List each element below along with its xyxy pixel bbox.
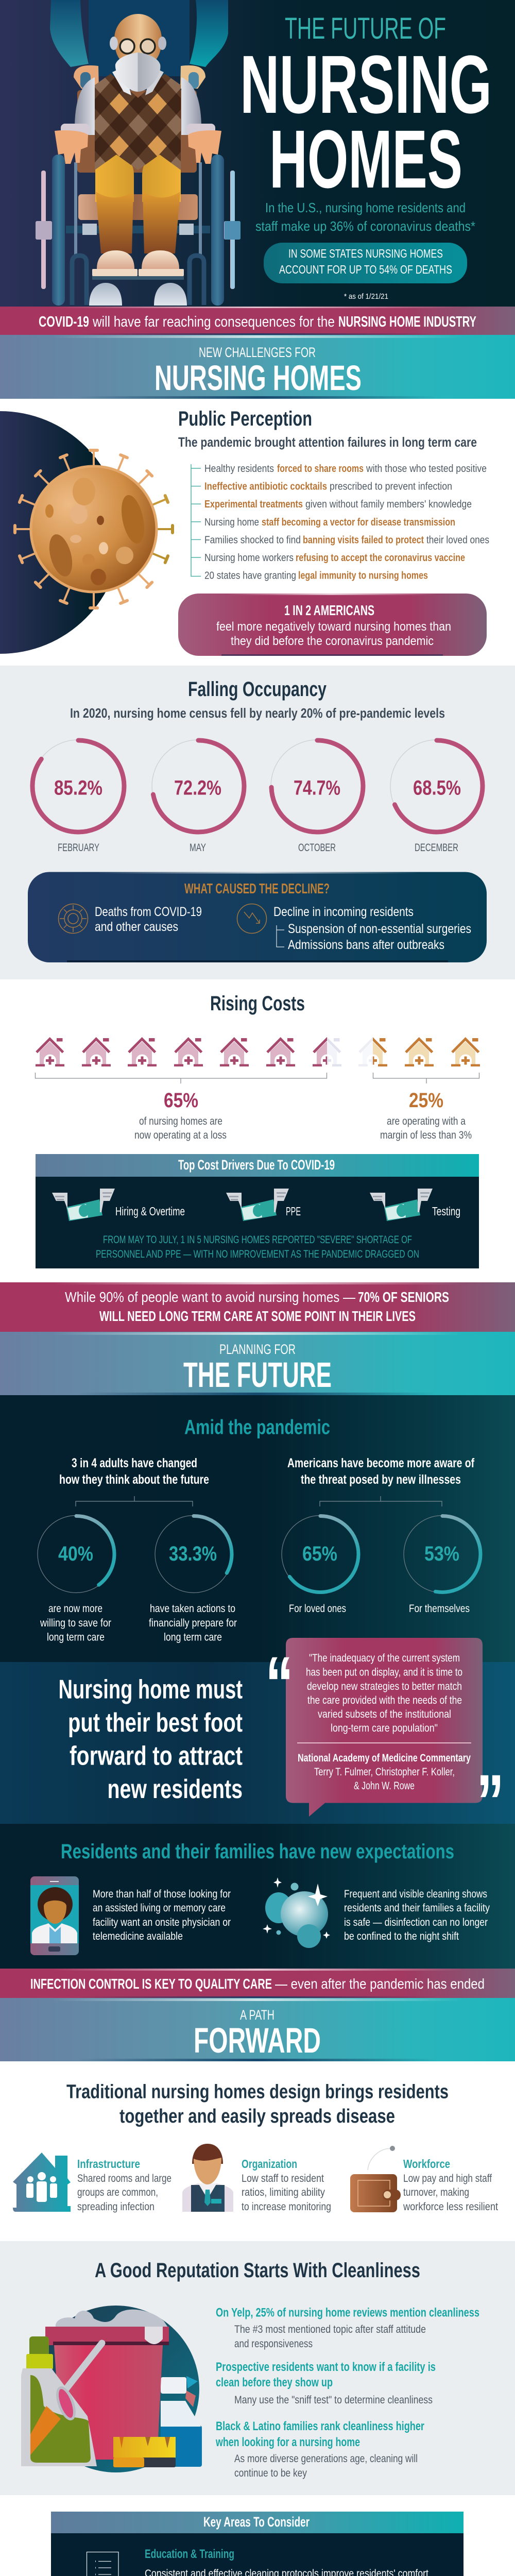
- panel: top cost drivers: PPE: [286, 1205, 301, 1218]
- list of failures: Healthy residents: [204, 463, 274, 474]
- list of failures: [191, 463, 489, 582]
- callout: what caused the decline: Admissions bans after outbreaks: [288, 938, 444, 952]
- donut: 53%: [404, 1516, 481, 1615]
- callout pill: 54% of deaths: ACCOUNT FOR UP TO 54% OF DEATHS: [279, 263, 452, 276]
- panel: traditional design: [13, 2081, 498, 2213]
- quote box: "The inadequacy of the current system: [309, 1652, 460, 1664]
- heading: Key Areas To Consider: [203, 2514, 310, 2530]
- bracket: 25%: [373, 1073, 479, 1141]
- list of failures: prescribed to prevent infection: [330, 481, 452, 493]
- donut: 65%: 65%: [302, 1543, 337, 1565]
- fact: black and latino families: when looking for a nursing home: [215, 2435, 360, 2449]
- quote box: the care provided with the needs of the: [307, 1694, 462, 1706]
- text: onsite physician: facility want an onsite physician or: [93, 1917, 231, 1928]
- list of failures: 20 states have granting: [204, 570, 296, 582]
- fact: prospective residents: [216, 2360, 436, 2406]
- bracket: 65%: 65%: [164, 1089, 198, 1112]
- workforce text: Low pay and high staff: [403, 2173, 492, 2184]
- list of failures: Families shocked to find: [204, 534, 301, 546]
- quote box: Terry T. Fulmer, Christopher F. Koller,: [314, 1766, 455, 1778]
- bracket: 65%: now operating at a loss: [134, 1129, 227, 1141]
- list of failures: staff becoming a vector for disease transmission: [262, 517, 455, 528]
- bracket: 25%: 25%: [409, 1089, 443, 1112]
- organization text: Organization: [242, 2157, 297, 2171]
- illustration: man in wheelchair with caregiver: [36, 0, 241, 306]
- banner: infection control: [0, 1969, 515, 1998]
- intro text: In the U.S., nursing home residents and: [265, 200, 466, 215]
- subheads: 3 in 4 adults have changed: [72, 1456, 197, 1470]
- panel: rising costs: [35, 992, 480, 1268]
- donut: May: 72.2%: [174, 777, 221, 800]
- heading: [66, 2081, 449, 2127]
- illustration: cleaning supplies: [21, 2306, 202, 2472]
- title: [240, 12, 492, 205]
- banner: 70% of seniors: While 90% of people want to avoid nursing homes —: [65, 1289, 355, 1305]
- banner: 70% of seniors: [0, 1282, 515, 1332]
- bracket: 25%: are operating with a: [387, 1115, 466, 1127]
- text: visible cleaning: [344, 1888, 490, 1942]
- quote box: long-term care population": [331, 1722, 438, 1734]
- fact: yelp: [216, 2306, 479, 2350]
- quote box: varied subsets of the institutional: [318, 1708, 451, 1720]
- list of failures: Nursing home workers: [204, 552, 294, 564]
- text: onsite physician: [93, 1888, 231, 1942]
- section header: new challenges: NEW CHALLENGES FOR: [199, 345, 316, 360]
- list of failures: with those who tested positive: [366, 463, 487, 474]
- donut: October: [271, 740, 364, 854]
- statement: put their best foot forward: new residents: [107, 1774, 243, 1804]
- donut: February: 85.2%: [54, 777, 102, 800]
- quote box: “: [265, 1640, 294, 1727]
- list of failures: Ineffective antibiotic cocktails: [204, 481, 327, 493]
- icon: staff person: [182, 2144, 233, 2212]
- donut: 65%: For loved ones: [289, 1603, 346, 1615]
- list of failures: Experimental treatments: [204, 499, 303, 510]
- workforce text: workforce less resilient: [403, 2201, 498, 2213]
- footnote: * as of 1/21/21: [344, 292, 388, 301]
- donut: December: DECEMBER: [415, 842, 458, 854]
- bracket: 65%: of nursing homes are: [139, 1115, 222, 1127]
- donut: 65%: [282, 1516, 359, 1615]
- icon: flying money, testing: [370, 1189, 433, 1221]
- fact: prospective residents: clean before they show up: [216, 2376, 333, 2389]
- subheads: [59, 1456, 475, 1487]
- icon: checklist: [87, 2552, 118, 2576]
- list of failures: given without family members' knowledge: [305, 499, 472, 510]
- bracket: 25%: margin of less than 3%: [380, 1129, 472, 1141]
- section header: a path forward: [0, 1998, 515, 2061]
- hero panel: [0, 0, 515, 308]
- donut: 33.3%: have taken actions to: [150, 1603, 235, 1615]
- donut: 40%: are now more: [48, 1603, 102, 1615]
- quote box: develop new strategies to better match: [307, 1681, 462, 1692]
- dark half circle: [0, 411, 122, 654]
- fact: black and latino families: Black & Latino families rank cleanliness higher: [216, 2419, 424, 2433]
- banner: 70% of seniors: 70% OF SENIORS: [358, 1289, 449, 1305]
- donut: 40%: willing to save for: [40, 1617, 111, 1629]
- heading: Amid the pandemic: [184, 1416, 330, 1438]
- list of failures: their loved ones: [426, 534, 489, 546]
- quote box: & John W. Rowe: [354, 1780, 415, 1792]
- heading: Rising Costs: [210, 992, 305, 1015]
- workforce text: [403, 2157, 498, 2213]
- donut: 33.3%: long term care: [164, 1631, 222, 1643]
- quote box: ”: [476, 1758, 504, 1845]
- donut: 53%: 53%: [424, 1543, 459, 1565]
- heading: together and easily spreads disease: [119, 2106, 395, 2127]
- quote box: has been put on display, and it is time to: [306, 1667, 462, 1679]
- banner: infection control: INFECTION CONTROL IS KEY TO QUALITY CARE: [30, 1976, 272, 1992]
- section header: the future: THE FUTURE: [183, 1355, 332, 1395]
- panel: the future, dark background: [0, 1395, 515, 1969]
- heading: Public Perception: [178, 408, 312, 430]
- callout: what caused the decline: Decline in incoming residents: [273, 905, 414, 919]
- banner: infection control: — even after the pandemic has ended: [275, 1976, 485, 1992]
- donut: December: [390, 740, 483, 854]
- fact: black and latino families: continue to be key: [234, 2467, 307, 2479]
- donut: 40%: 40%: [58, 1543, 93, 1565]
- fact: black and latino families: As more diverse generations age, cleaning will: [234, 2453, 418, 2465]
- callout pill: 54% of deaths: [264, 243, 467, 283]
- section header: the future: PLANNING FOR: [219, 1342, 296, 1357]
- heading: Falling Occupancy: [188, 678, 327, 701]
- organization text: [242, 2157, 331, 2213]
- fact: prospective residents: Many use the "sniff test" to determine cleanliness: [234, 2394, 433, 2406]
- infrastructure text: [77, 2157, 171, 2213]
- donut: October: OCTOBER: [298, 842, 336, 854]
- icon: flying money, hiring: [52, 1189, 115, 1221]
- callout: what caused the decline: Deaths from COVID-19: [95, 905, 202, 919]
- fact: yelp: The #3 most mentioned topic after staff attitude: [234, 2324, 426, 2335]
- statement: put their best foot forward: forward to attract: [70, 1741, 243, 1771]
- organization text: ratios, limiting ability: [242, 2187, 325, 2198]
- workforce text: Workforce: [403, 2157, 450, 2171]
- icon: falling trend: [237, 904, 267, 934]
- banner: far reaching consequences: COVID-19: [39, 314, 89, 330]
- infrastructure text: Infrastructure: [77, 2157, 140, 2171]
- list of failures: refusing to accept the coronavirus vaccine: [296, 552, 465, 564]
- donut: December: 68.5%: [413, 777, 461, 800]
- item: education: Education & Training: [145, 2547, 234, 2561]
- workforce text: turnover, making: [403, 2187, 469, 2198]
- donut: May: MAY: [190, 842, 206, 854]
- section header: new challenges: [0, 335, 515, 399]
- heading: A Good Reputation Starts With Cleanliness: [95, 2259, 420, 2282]
- callout pill: 54% of deaths: IN SOME STATES NURSING HOMES: [288, 247, 443, 260]
- donut: 53%: For themselves: [409, 1603, 470, 1615]
- donut: 33.3%: [149, 1516, 237, 1643]
- statement: put their best foot forward: Nursing home must: [59, 1675, 243, 1705]
- infrastructure text: spreading infection: [77, 2201, 154, 2213]
- text: visible cleaning: Frequent and visible cleaning shows: [344, 1888, 487, 1900]
- text: visible cleaning: be confined to the night shift: [344, 1930, 459, 1942]
- statement: put their best foot forward: put their best foot: [68, 1708, 243, 1738]
- panel: cleanliness reputation: [0, 2241, 515, 2495]
- icon: flying money, PPE: [226, 1189, 289, 1221]
- text: onsite physician: More than half of those looking for: [93, 1888, 231, 1900]
- subheading: In 2020, nursing home census fell by nearly 20% of pre-pandemic levels: [70, 705, 445, 721]
- panel: key areas to consider: [51, 2512, 464, 2576]
- list of failures: legal immunity to nursing homes: [298, 570, 428, 582]
- icon: wallet: [350, 2146, 401, 2212]
- icon: coronavirus: [13, 449, 174, 609]
- subheads: the threat posed by new illnesses: [301, 1472, 461, 1487]
- fact: yelp: and responsiveness: [234, 2338, 313, 2350]
- list of failures: forced to share rooms: [277, 463, 364, 474]
- donut: February: [32, 740, 125, 854]
- donut: 33.3%: 33.3%: [169, 1543, 217, 1565]
- item: education: [145, 2547, 428, 2576]
- panel: falling occupancy: [0, 666, 515, 979]
- text: onsite physician: an assisted living or memory care: [93, 1902, 226, 1914]
- callout: what caused the decline: Suspension of non-essential surgeries: [288, 922, 471, 936]
- intro text: [255, 200, 475, 234]
- donut: February: FEBRUARY: [58, 842, 99, 854]
- note on shortages: [96, 1234, 419, 1260]
- icon: telemedicine phone: [30, 1876, 79, 1955]
- list of failures: Nursing home: [204, 517, 259, 528]
- callout: 1 in 2 Americans: they did before the coronavirus pandemic: [231, 634, 434, 648]
- bracket: 65%: [35, 1073, 327, 1141]
- donut: 40%: long term care: [47, 1631, 105, 1643]
- panel: top cost drivers: Top Cost Drivers Due To COVID-19: [178, 1157, 335, 1173]
- callout: 1 in 2 Americans: [178, 594, 487, 656]
- quote box: [265, 1638, 504, 1845]
- subheads: how they think about the future: [59, 1472, 209, 1487]
- statement: put their best foot forward: [59, 1675, 243, 1804]
- section header: a path forward: A PATH: [240, 2007, 274, 2023]
- banner: far reaching consequences: [0, 307, 515, 335]
- panel: top cost drivers: [36, 1154, 479, 1268]
- icon: virus deaths: [59, 904, 88, 934]
- text: visible cleaning: residents and their families a facility: [344, 1902, 490, 1914]
- panel: top cost drivers: Hiring & Overtime: [115, 1205, 185, 1218]
- icon: clean bubbles: [263, 1877, 330, 1948]
- fact: prospective residents: Prospective residents want to know if a facility is: [216, 2360, 436, 2374]
- panel: public perception: [0, 408, 489, 656]
- intro text: staff make up 36% of coronavirus deaths*: [255, 218, 475, 234]
- callout: what caused the decline: and other causes: [95, 920, 178, 934]
- fact: black and latino families: [215, 2419, 424, 2479]
- text: onsite physician: telemedicine available: [93, 1930, 183, 1942]
- donut: May: [152, 740, 245, 854]
- panel: top cost drivers: Testing: [432, 1205, 460, 1218]
- callout: what caused the decline: [28, 872, 487, 962]
- text: visible cleaning: is safe — disinfection can no longer: [344, 1917, 488, 1928]
- icons: house row: [36, 1038, 480, 1066]
- banner: far reaching consequences: will have far reaching consequences for the: [92, 314, 335, 330]
- organization text: Low staff to resident: [242, 2173, 324, 2184]
- donut: 40%: [38, 1516, 115, 1643]
- list of failures: banning visits failed to protect: [303, 534, 424, 546]
- callout: what caused the decline: WHAT CAUSED THE DECLINE?: [184, 880, 330, 896]
- icon: crowded house: [13, 2153, 71, 2212]
- infrastructure text: Shared rooms and large: [77, 2173, 171, 2184]
- organization text: to increase monitoring: [242, 2201, 331, 2213]
- section header: the future: [0, 1332, 515, 1395]
- brackets: [76, 1496, 442, 1506]
- callout: 1 in 2 Americans: feel more negatively toward nursing homes than: [216, 620, 451, 634]
- callout: 1 in 2 Americans: 1 IN 2 AMERICANS: [284, 602, 374, 618]
- infrastructure text: groups are common,: [77, 2187, 158, 2198]
- section header: a path forward: FORWARD: [194, 2021, 321, 2060]
- donut: October: 74.7%: [294, 777, 340, 800]
- donut: 33.3%: financially prepare for: [149, 1617, 237, 1629]
- section header: new challenges: NURSING HOMES: [154, 358, 362, 398]
